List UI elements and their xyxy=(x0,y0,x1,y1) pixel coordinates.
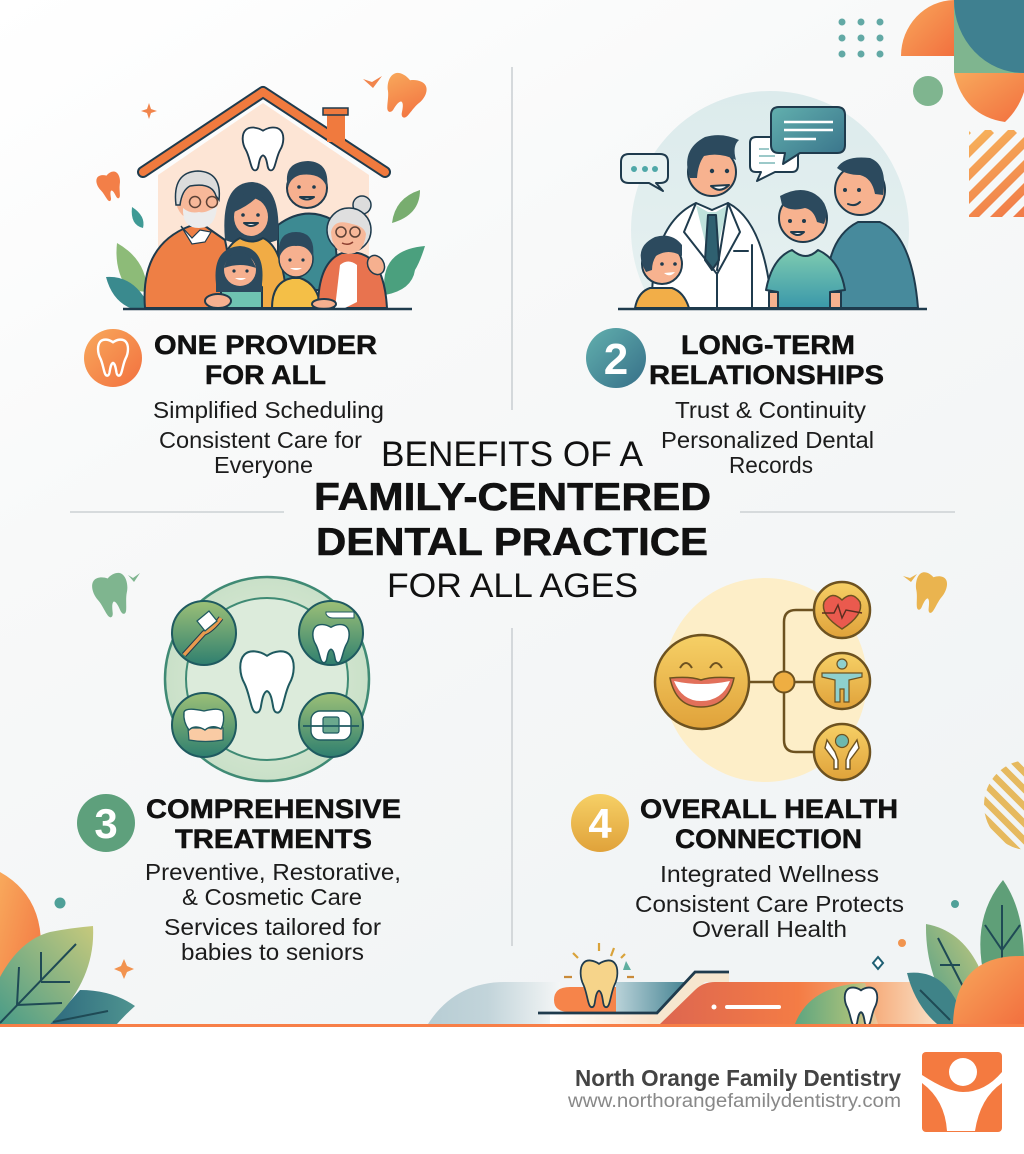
heading: LONG-TERM xyxy=(681,330,855,360)
badge 4: 4 xyxy=(588,800,612,847)
text block: Integrated Wellness xyxy=(660,861,879,887)
illustration: smile connected to health xyxy=(655,578,870,782)
heading: CONNECTION xyxy=(675,824,862,854)
text block xyxy=(153,397,384,478)
dividers xyxy=(70,67,955,946)
title: BENEFITS OF A xyxy=(381,435,644,474)
text block xyxy=(635,861,904,942)
footer band xyxy=(0,1027,1024,1154)
orange baseline xyxy=(0,1024,1024,1027)
decoration: bottom banner xyxy=(428,900,959,1026)
badge 1 xyxy=(84,329,142,387)
decoration: bottom left foliage xyxy=(0,872,135,1024)
icon: green check xyxy=(128,573,140,582)
decoration: bottom right foliage xyxy=(907,880,1024,1024)
text block xyxy=(661,397,874,478)
text block: Personalized Dental xyxy=(661,427,874,453)
title: DENTAL PRACTICE xyxy=(316,521,708,564)
icon: gold check xyxy=(903,574,917,582)
text block: Simplified Scheduling xyxy=(153,397,384,423)
icon: sparkle xyxy=(141,103,157,119)
badge 3 xyxy=(77,794,135,852)
text block: Trust & Continuity xyxy=(675,397,867,423)
text block: Consistent Care Protects xyxy=(635,891,904,917)
decoration: top right shapes xyxy=(838,0,1024,230)
footer text: North Orange Family Dentistry xyxy=(575,1065,901,1091)
heading: OVERALL HEALTH xyxy=(640,794,898,824)
heading xyxy=(649,330,884,390)
heading xyxy=(146,794,401,854)
icon: green tooth xyxy=(90,571,135,620)
panel: overall health connection xyxy=(571,571,1024,942)
heading xyxy=(640,794,898,854)
badge 4 xyxy=(571,794,629,852)
panel: one provider for all xyxy=(84,70,429,478)
badge 2 xyxy=(586,328,646,388)
icon: gold tooth xyxy=(909,571,949,615)
footer text xyxy=(567,1065,901,1112)
text block: & Cosmetic Care xyxy=(182,884,362,910)
heading xyxy=(154,330,377,390)
text block: Overall Health xyxy=(692,916,847,942)
illustration: dentist with family xyxy=(618,91,927,310)
text block: Consistent Care for xyxy=(159,427,362,453)
panel: long-term relationships xyxy=(586,91,927,478)
text block: Services tailored for xyxy=(164,914,381,940)
title: FAMILY-CENTERED xyxy=(314,476,711,519)
panel: comprehensive treatments xyxy=(77,571,401,965)
badge 3: 3 xyxy=(94,800,118,847)
decoration: striped circle xyxy=(984,761,1024,850)
heading: COMPREHENSIVE xyxy=(146,794,401,824)
heading: TREATMENTS xyxy=(175,824,372,854)
title: FOR ALL AGES xyxy=(387,567,638,605)
illustration: family in house xyxy=(106,92,425,309)
logo xyxy=(922,1052,1002,1132)
text block: babies to seniors xyxy=(181,939,364,965)
heading: RELATIONSHIPS xyxy=(649,360,884,390)
icon: orange tooth xyxy=(378,70,429,122)
badge 2: 2 xyxy=(604,335,628,384)
heading: FOR ALL xyxy=(205,360,326,390)
heading: ONE PROVIDER xyxy=(154,330,377,360)
text block xyxy=(145,859,401,965)
footer text: www.northorangefamilydentistry.com xyxy=(567,1091,901,1112)
illustration: treatment circle xyxy=(165,577,369,781)
icon: check xyxy=(363,76,382,88)
text block: Records xyxy=(729,452,813,478)
text block: Preventive, Restorative, xyxy=(145,859,401,885)
icon: small orange tooth xyxy=(95,170,126,203)
title xyxy=(314,435,711,605)
text block: Everyone xyxy=(214,452,313,478)
